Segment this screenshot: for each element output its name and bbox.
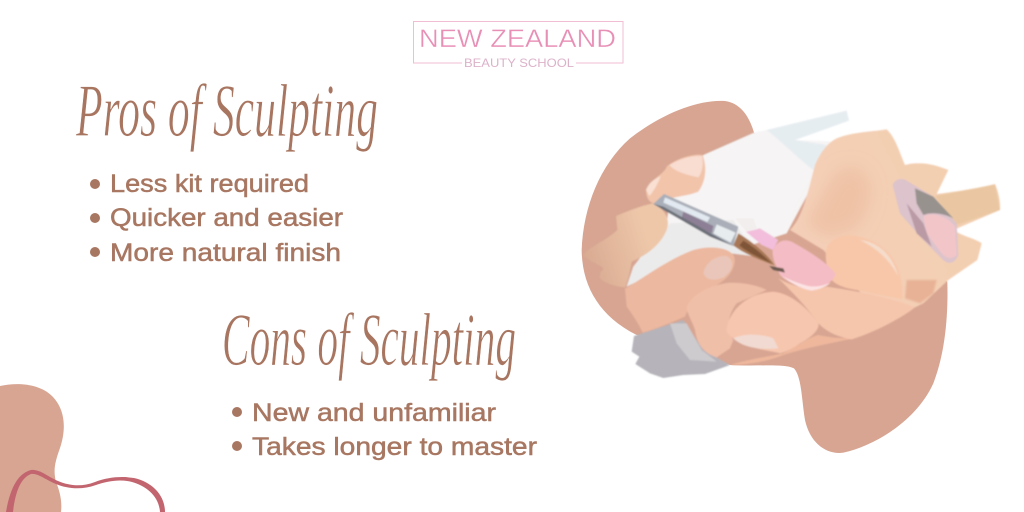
logo: New Zealand Beauty School: [414, 22, 623, 70]
pink sculpted nail: [773, 240, 836, 291]
upper left fingertip: [646, 155, 705, 203]
far hand: [790, 129, 1000, 307]
photo contents: [583, 111, 1000, 378]
list: cons: Takes longer to master: [252, 433, 537, 461]
main finger with nail: [778, 278, 915, 339]
list: cons: [232, 399, 537, 461]
cloth background: [627, 111, 849, 287]
list: pros: Quicker and easier: [110, 204, 343, 232]
photo: hands applying nail sculpt on tan blob: [582, 101, 1000, 453]
grey lower background: [632, 320, 730, 378]
logo: New Zealand Beauty School: BEAUTY SCHOOL: [464, 56, 574, 70]
list: cons: New and unfamiliar: [252, 399, 496, 427]
list: pros: Less kit required: [110, 170, 309, 198]
list: pros: More natural finish: [110, 239, 341, 267]
thumb: [826, 235, 903, 299]
heading: cons of sculpting: Cons of Sculpting: [222, 298, 516, 381]
logo: New Zealand Beauty School: NEW ZEALAND: [419, 25, 616, 53]
list: pros: [90, 170, 343, 267]
nail brush: [733, 233, 775, 265]
decorative blob and curve: bottom left: [0, 384, 165, 512]
tan blob behind photo: [582, 101, 947, 453]
lower left finger: [625, 247, 735, 333]
heading: pros of sculpting: Pros of Sculpting: [75, 69, 378, 152]
left finger holding brush: [583, 203, 668, 287]
dark nail on far finger: [893, 179, 958, 263]
lower fingers: [687, 283, 767, 357]
